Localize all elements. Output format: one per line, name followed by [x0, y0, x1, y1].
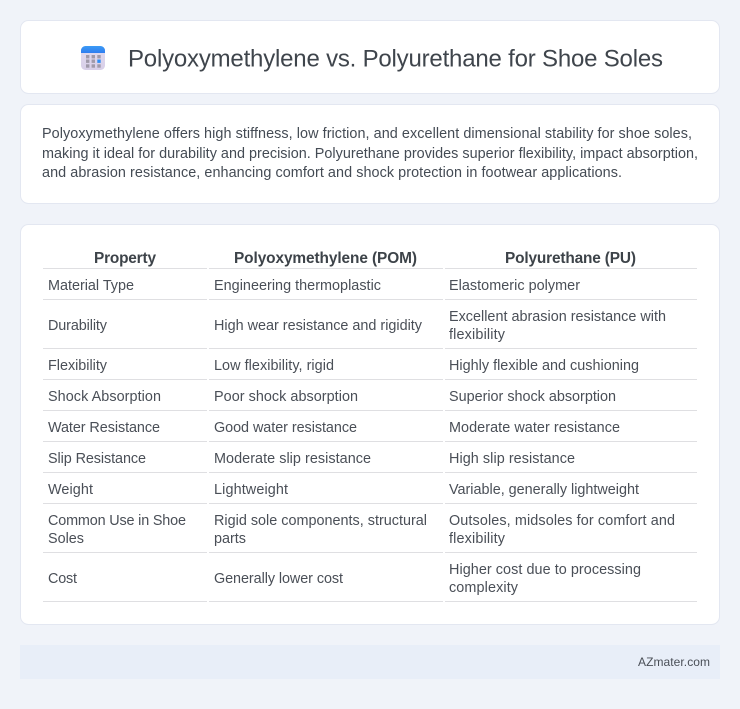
summary text: making it ideal for durability and precision. Polyurethane provides superior flexibility, impact absorption, — [42, 146, 698, 162]
row: common use in shoe soles: Rigid sole components, structural — [214, 513, 427, 529]
row: durability: flexibility — [449, 327, 506, 343]
row: shock absorption — [48, 389, 616, 405]
row: material type — [48, 278, 580, 294]
row: material type: Material Type — [48, 278, 134, 294]
summary text — [42, 126, 698, 181]
panel: summary — [20, 104, 720, 204]
footer — [20, 645, 720, 679]
row: water resistance: Moderate water resistance — [449, 420, 620, 436]
table header — [94, 250, 636, 267]
row: common use in shoe soles: parts — [214, 531, 246, 547]
panel: comparison table — [20, 224, 720, 624]
row: common use in shoe soles: flexibility — [449, 531, 506, 547]
row: material type: Elastomeric polymer — [449, 278, 580, 294]
footer source: AZmater.com — [638, 655, 710, 669]
row: shock absorption: Poor shock absorption — [214, 389, 358, 405]
row: cost: Higher cost due to processing — [449, 562, 641, 578]
row: water resistance — [48, 420, 620, 436]
row: material type: Engineering thermoplastic — [214, 278, 381, 294]
row: slip resistance: High slip resistance — [449, 451, 575, 467]
row: weight: Lightweight — [214, 482, 288, 498]
row: shock absorption: Shock Absorption — [48, 389, 161, 405]
row: water resistance: Water Resistance — [48, 420, 160, 436]
row: durability: Durability — [48, 318, 108, 334]
row: common use in shoe soles: Soles — [48, 531, 84, 547]
row: durability: Excellent abrasion resistance with — [449, 309, 666, 325]
row: slip resistance — [48, 451, 575, 467]
row: slip resistance: Slip Resistance — [48, 451, 146, 467]
row: common use in shoe soles: Common Use in Shoe — [48, 513, 186, 529]
icon: calendar — [81, 46, 105, 70]
row: common use in shoe soles: Outsoles, midsoles for comfort and — [449, 513, 675, 529]
row: common use in shoe soles — [48, 513, 675, 547]
row: flexibility: Low flexibility, rigid — [214, 358, 334, 374]
summary text: Polyoxymethylene offers high stiffness, low friction, and excellent dimensional stability for shoe soles, — [42, 126, 692, 142]
row: water resistance: Good water resistance — [214, 420, 357, 436]
row: cost: Generally lower cost — [214, 571, 343, 587]
summary text: and abrasion resistance, enhancing comfort and shock protection in footwear applications. — [42, 165, 622, 181]
table header: Property — [94, 250, 156, 267]
row: flexibility — [48, 358, 639, 374]
row: shock absorption: Superior shock absorption — [449, 389, 616, 405]
row: cost: Cost — [48, 571, 77, 587]
title panel — [20, 20, 720, 94]
table rules — [43, 268, 697, 602]
table header: Polyurethane (PU) — [505, 250, 636, 267]
row: flexibility: Flexibility — [48, 358, 108, 374]
row: weight: Weight — [48, 482, 93, 498]
row: weight: Variable, generally lightweight — [449, 482, 639, 498]
table header: Polyoxymethylene (POM) — [234, 250, 417, 267]
row: cost — [48, 562, 641, 596]
title: Polyoxymethylene vs. Polyurethane for Shoe Soles — [128, 46, 663, 72]
row: durability — [48, 309, 666, 343]
row: cost: complexity — [449, 580, 519, 596]
row: weight — [48, 482, 639, 498]
row: durability: High wear resistance and rigidity — [214, 318, 423, 334]
row: flexibility: Highly flexible and cushioning — [449, 358, 639, 374]
row: slip resistance: Moderate slip resistance — [214, 451, 371, 467]
